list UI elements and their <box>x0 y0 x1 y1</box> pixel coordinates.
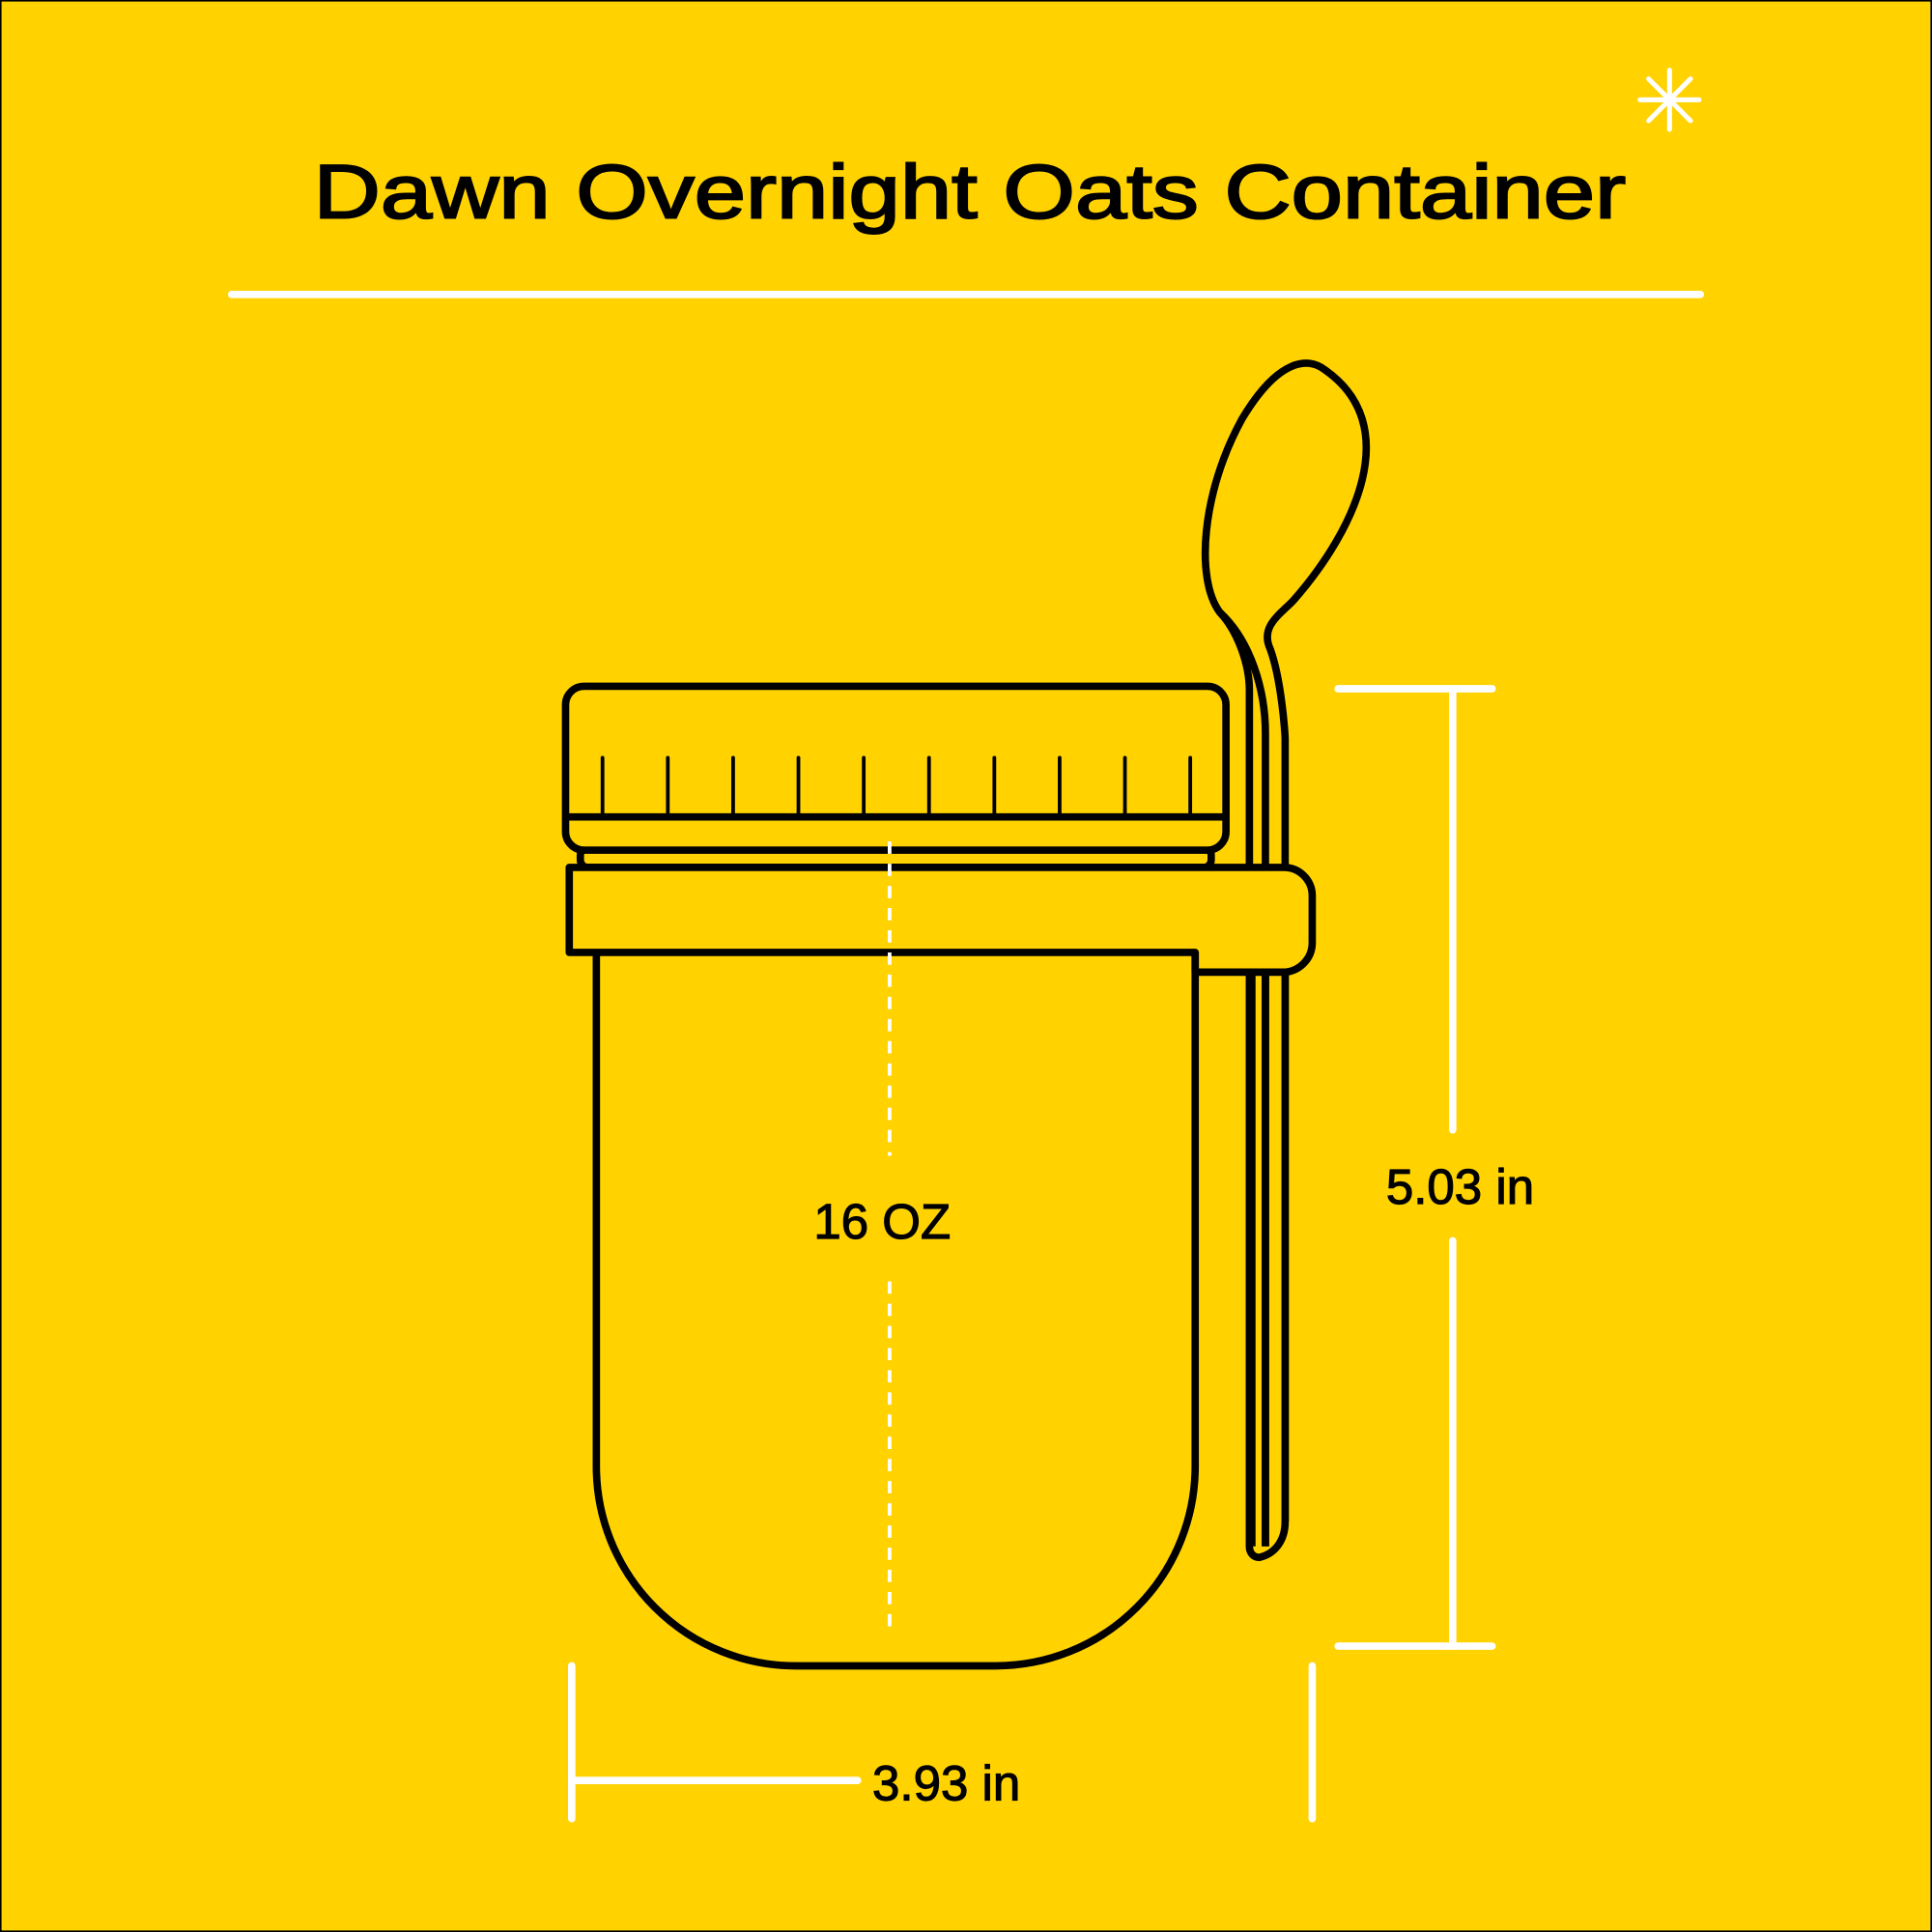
height label: 5.03 in <box>1386 1159 1534 1214</box>
title: Dawn Overnight Oats Container <box>314 149 1626 235</box>
illustration: jar with spoon <box>565 363 1366 1665</box>
height dimension <box>1338 689 1492 1646</box>
width dimension <box>572 1665 1312 1819</box>
icon: asterisk <box>1640 71 1699 129</box>
lid <box>565 686 1226 867</box>
jar body <box>596 952 1195 1665</box>
collar <box>569 867 1312 972</box>
capacity label: 16 OZ <box>813 1194 951 1249</box>
spoon <box>1206 363 1366 1557</box>
width label: 3.93 in <box>872 1756 1020 1811</box>
dashed centre line <box>888 841 891 1636</box>
